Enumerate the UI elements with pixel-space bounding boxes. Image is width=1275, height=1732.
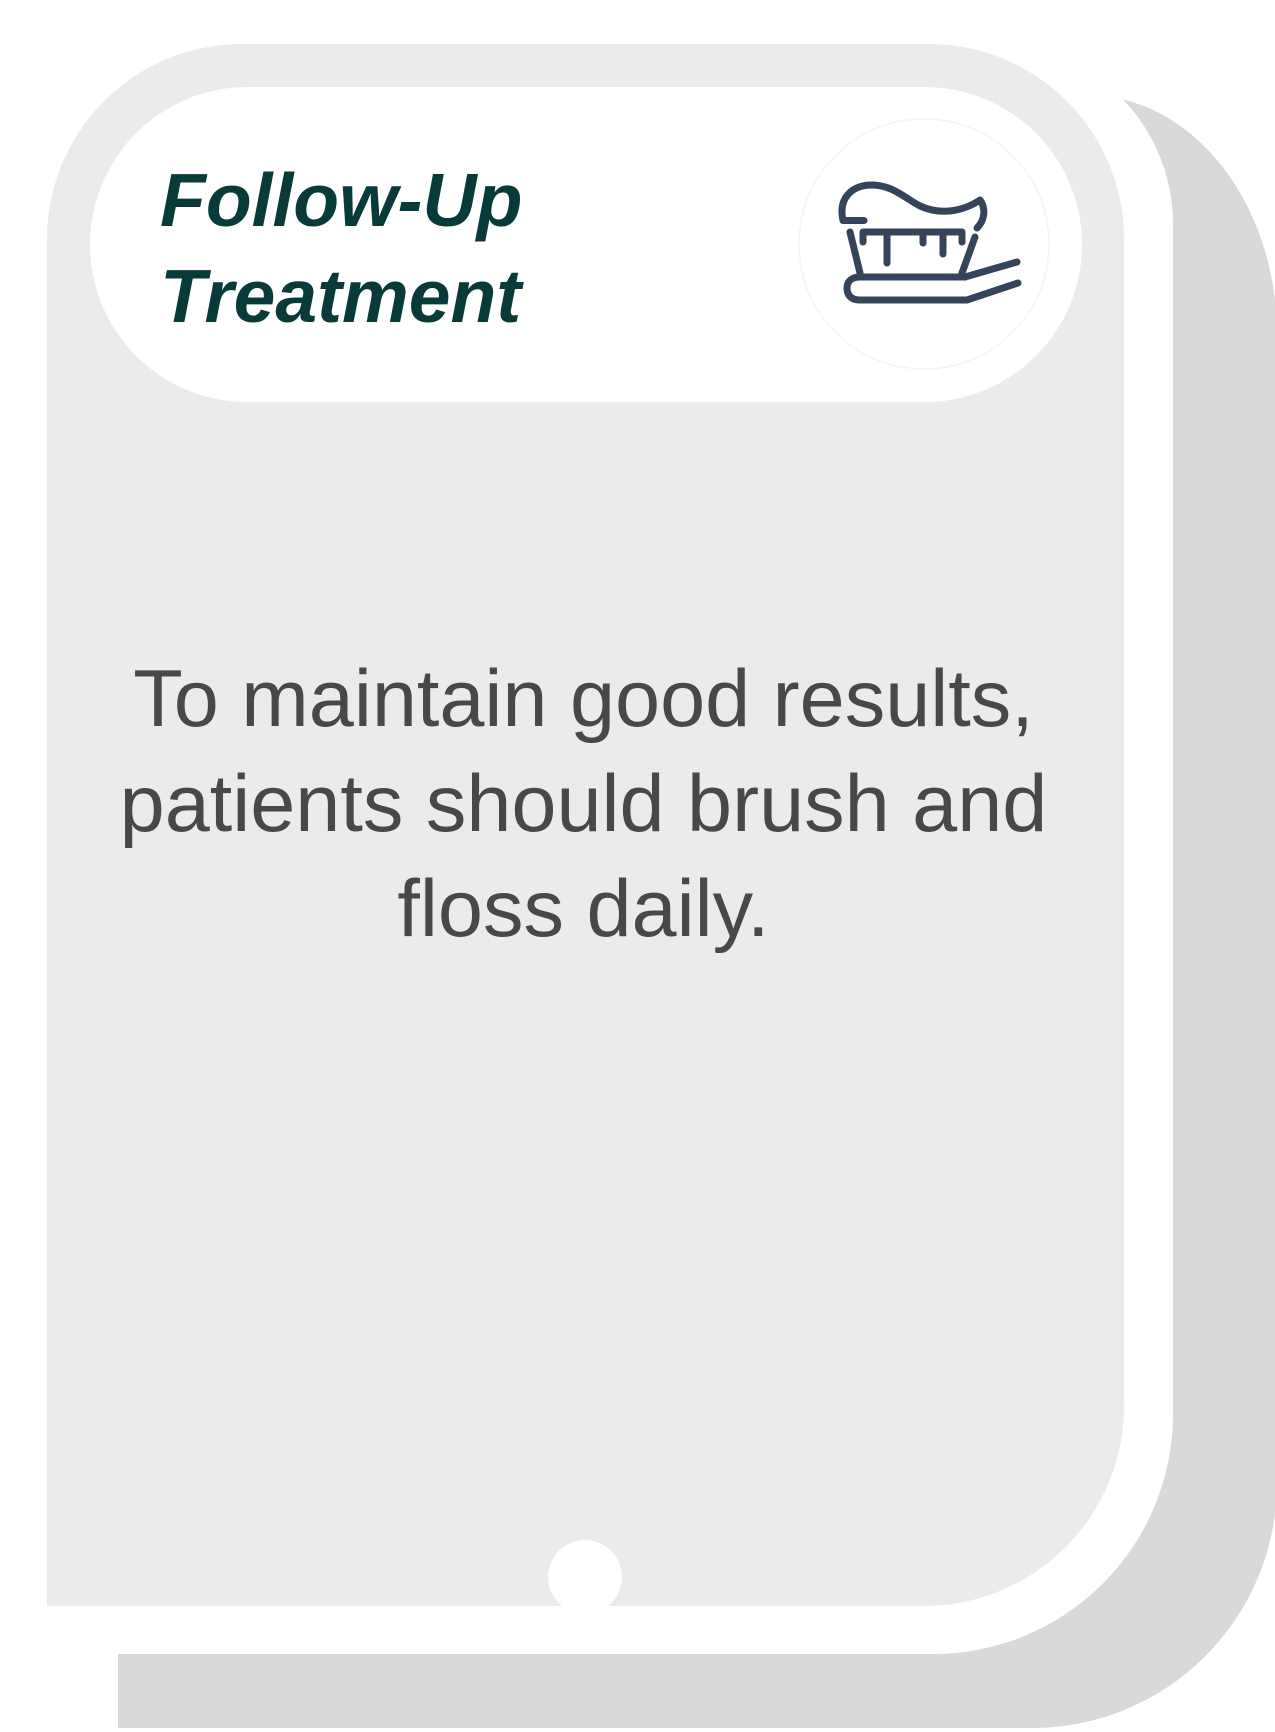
icon: toothbrush in circle [798,118,1050,370]
body text [120,654,1047,954]
header pill [90,87,1082,402]
body text: patients should brush and [120,759,1047,849]
body text: To maintain good results, [133,654,1034,744]
title: Treatment [160,254,521,338]
decorative dot [548,1540,622,1614]
title: Follow-Up [160,158,522,242]
gray panel [47,44,1124,1606]
body text: floss daily. [397,864,770,954]
title [160,158,524,338]
